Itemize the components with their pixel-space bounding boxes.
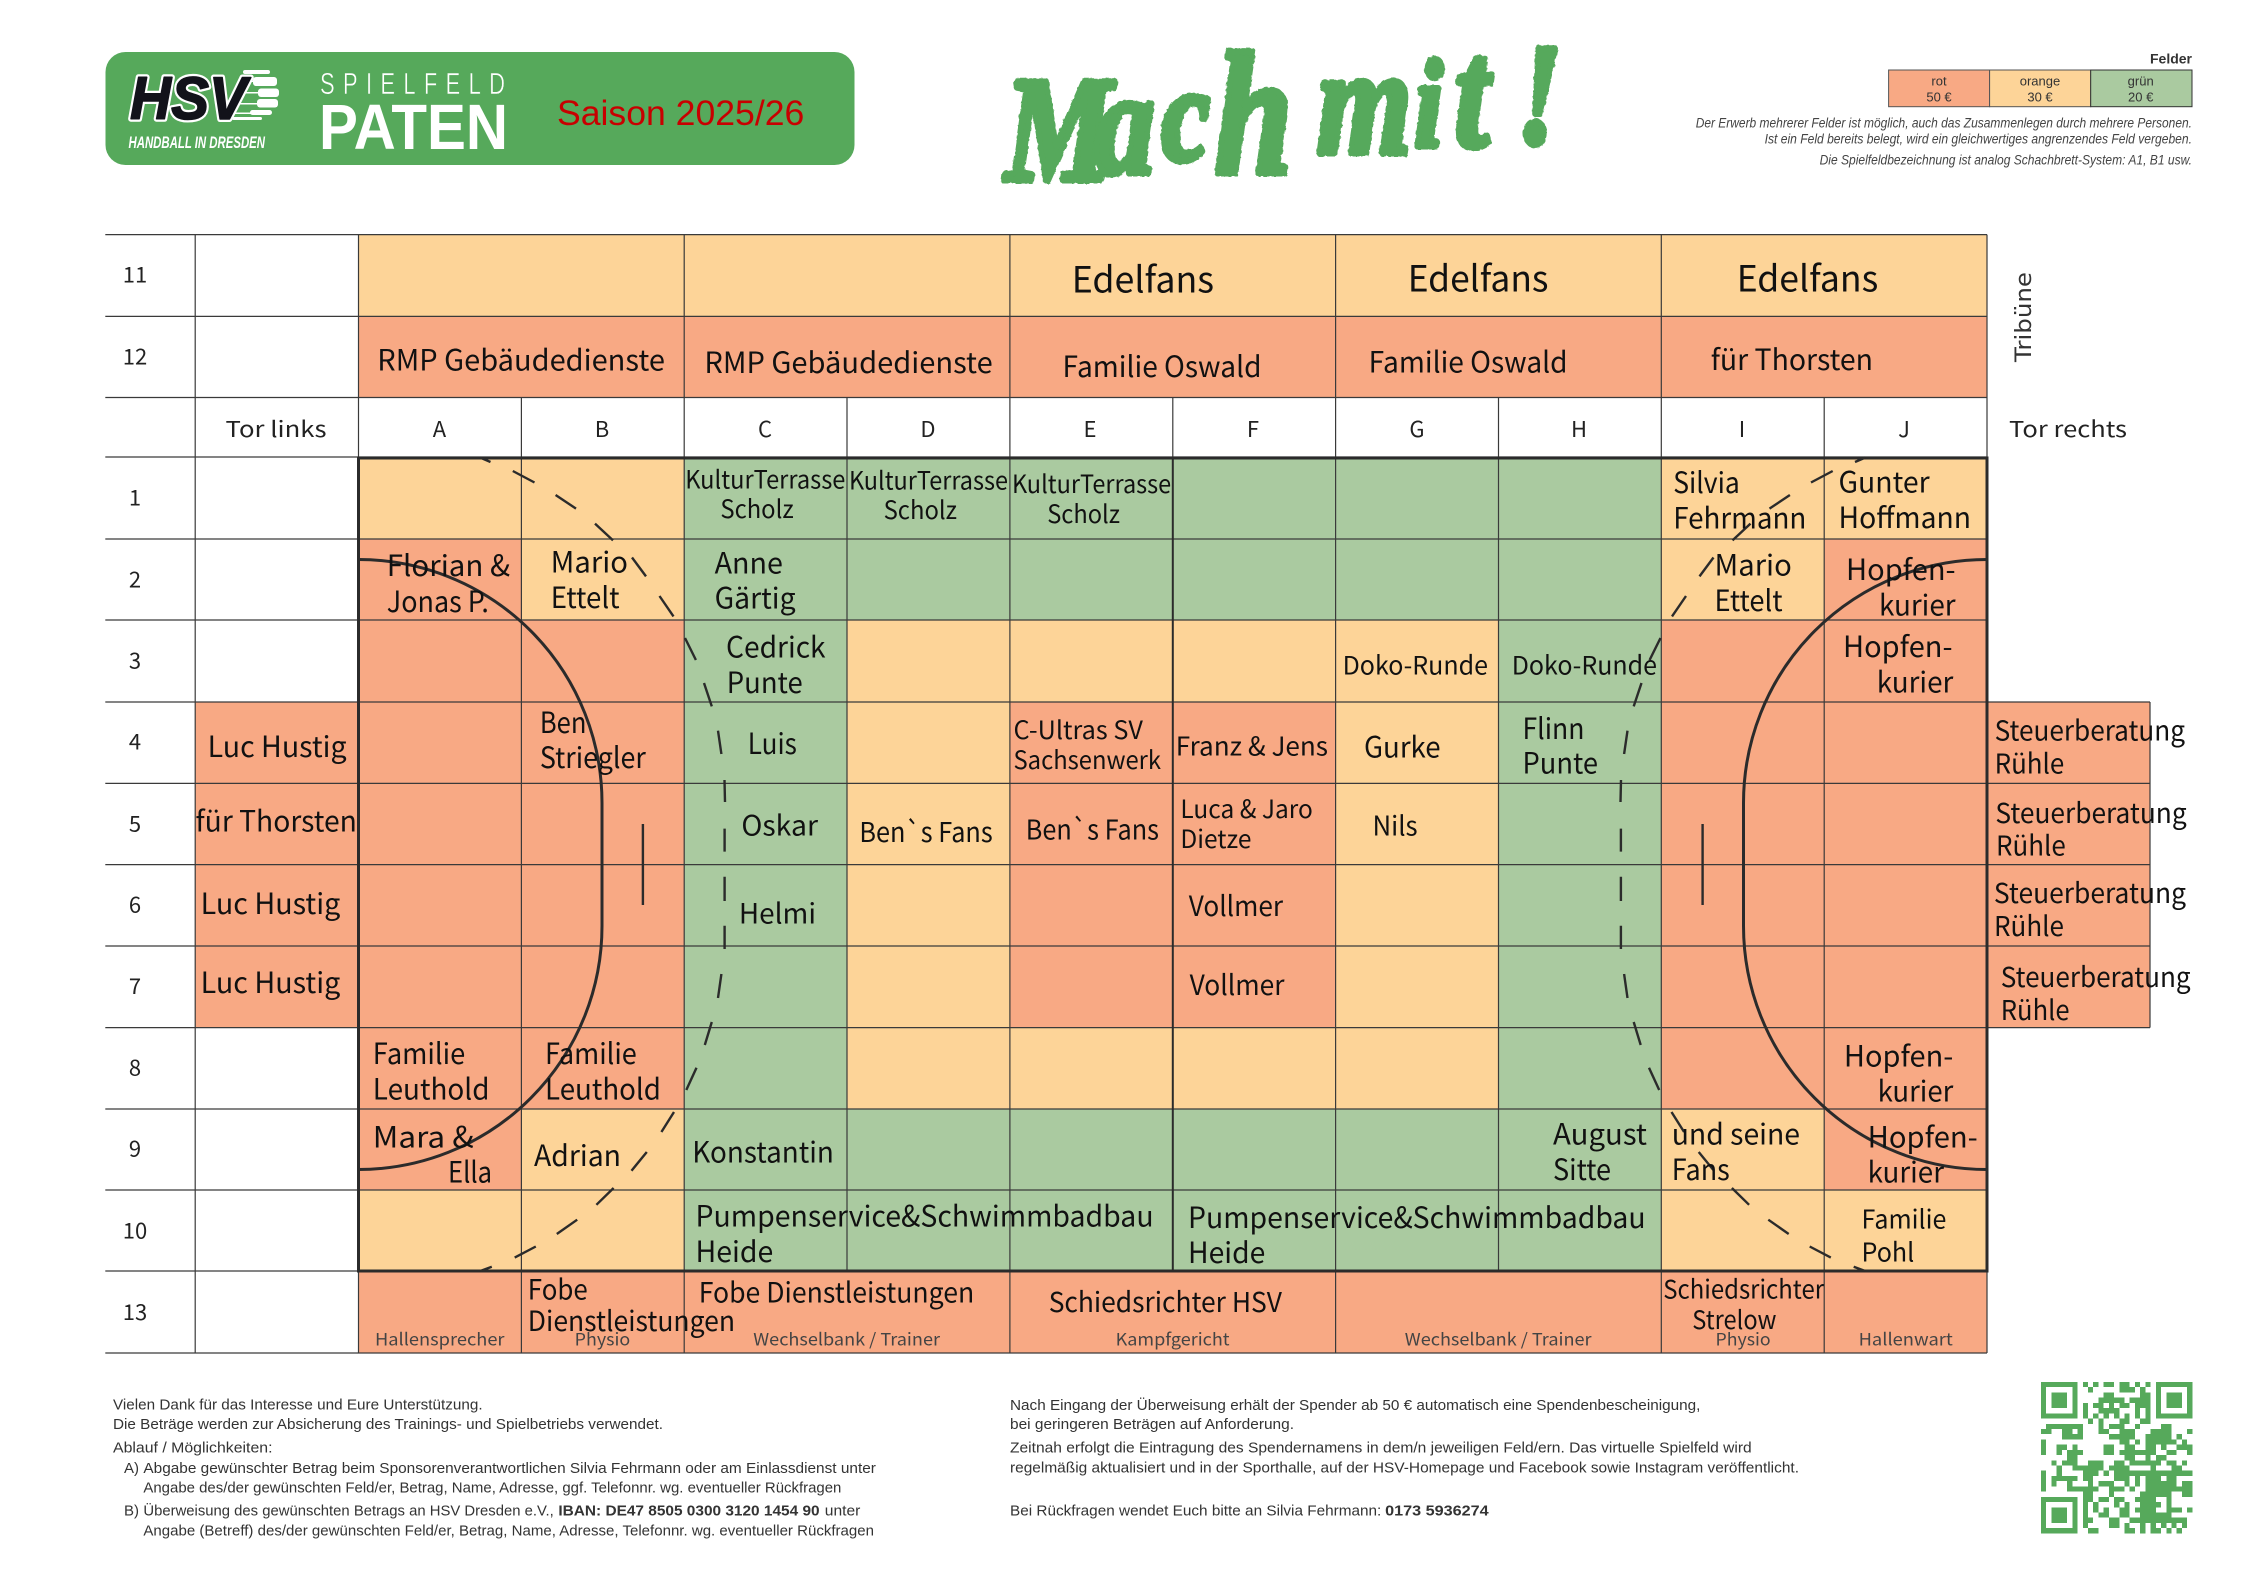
sponsors: row 2: Mario bbox=[1714, 543, 1792, 585]
footer text: right column: regelmäßig aktualisiert und in der Sporthalle, auf der HSV-Homepage und Facebook sowie Instagram veröffentlicht. bbox=[1010, 1460, 1799, 1477]
sponsors: row 3: kurier bbox=[1877, 660, 1954, 702]
footer text: left column: Abgabe gewünschter Betrag beim Sponsorenverantwortlichen Silvia Fehrmann oder am Einlassdienst unter bbox=[143, 1460, 876, 1477]
footer text: left column: IBAN: DE47 8505 0300 3120 1454 90 bbox=[558, 1503, 820, 1520]
sponsors: row 7: Luc Hustig bbox=[201, 960, 340, 1002]
sponsors: row 5: für Thorsten bbox=[196, 799, 357, 841]
title: Mach mit!: t bbox=[1455, 9, 1493, 180]
sponsors: row 2: Jonas P. bbox=[387, 579, 489, 621]
sponsors: row 10: Heide bbox=[696, 1229, 773, 1271]
court markings: left bbox=[358, 458, 725, 1271]
sponsors: row 8: kurier bbox=[1878, 1068, 1954, 1110]
sponsors: row 13: Fobe Dienstleistungen bbox=[699, 1271, 974, 1311]
row numbers: 9 bbox=[129, 1132, 141, 1164]
column headers: Tor rechts bbox=[2009, 412, 2127, 444]
sponsors: row 9: und seine bbox=[1672, 1111, 1800, 1153]
banner: HSV Spielfeld Paten bbox=[106, 52, 854, 165]
sponsors: row 1: Scholz bbox=[720, 490, 794, 526]
sponsors: row 4: Punte bbox=[1522, 741, 1598, 783]
sponsors: row 2: Florian & bbox=[387, 543, 510, 585]
column headers: A bbox=[433, 412, 447, 444]
sponsors: row 9: Sitte bbox=[1553, 1147, 1611, 1189]
sponsors: row 1: Fehrmann bbox=[1673, 496, 1806, 538]
column headers: E bbox=[1084, 412, 1096, 444]
logo: HSV handball: HSV bbox=[130, 65, 252, 132]
row numbers: 8 bbox=[129, 1050, 141, 1082]
sponsors: rows 11 and 12: RMP Gebäudedienste bbox=[377, 338, 665, 380]
sponsors: row 6: Steuerberatung bbox=[1994, 871, 2186, 911]
sponsors: row 10: Pumpenservice&Schwimmbadbau bbox=[1188, 1195, 1646, 1237]
label: Tribüne: Tribüne bbox=[2012, 272, 2037, 363]
logo: HSV handball: HANDBALL IN DRESDEN bbox=[128, 134, 266, 152]
sponsors: row 4: Ben bbox=[540, 700, 586, 742]
legend notes: Die Spielfeldbezeichnung ist analog Schachbrett-System: A1, B1 usw. bbox=[1820, 152, 2192, 167]
legend notes: Ist ein Feld bereits belegt, wird ein gleichwertiges angrenzendes Feld vergeben. bbox=[1765, 131, 2192, 146]
row numbers: 11 bbox=[123, 258, 147, 290]
footer text: left column: unter bbox=[825, 1503, 860, 1520]
sponsors: row 1: KulturTerrasse bbox=[849, 461, 1008, 497]
footer text: left column: Angabe des/der gewünschten Feld/er, Betrag, Name, Adresse, ggf. Telefonnr. wg. eventueller Rückfragen bbox=[143, 1479, 841, 1496]
wordmark: Spielfeld Paten: PATEN bbox=[319, 91, 508, 163]
sponsors: row 6: Rühle bbox=[1994, 904, 2064, 944]
column headers: Tor links bbox=[226, 412, 326, 444]
row 13 position labels: Wechselbank / Trainer bbox=[1405, 1326, 1592, 1351]
sponsors: row 4: Striegler bbox=[540, 735, 646, 777]
sponsors: row 9: Fans bbox=[1672, 1147, 1730, 1189]
grid: coloured field cells bbox=[105, 235, 2150, 1353]
sponsors: row 3: Cedrick bbox=[726, 624, 826, 666]
logo: HSV handball: HSV bbox=[130, 65, 252, 132]
row 13 position labels: Physio bbox=[575, 1326, 630, 1351]
column headers: F bbox=[1247, 412, 1259, 444]
footer text: left column: B) bbox=[124, 1503, 139, 1520]
sponsors: row 9: Hopfen- bbox=[1868, 1114, 1978, 1156]
sponsors: row 6: Vollmer bbox=[1189, 885, 1283, 925]
sponsors: row 5: Oskar bbox=[741, 804, 818, 844]
sponsors: row 1: Silvia bbox=[1673, 460, 1740, 502]
sponsors: row 7: Rühle bbox=[2001, 988, 2070, 1028]
sponsors: row 10: Familie bbox=[1862, 1200, 1946, 1236]
column headers: B bbox=[595, 412, 609, 444]
sponsors: row 1: Gunter bbox=[1838, 460, 1930, 502]
row 13 position labels: Wechselbank / Trainer bbox=[753, 1326, 940, 1351]
sponsors: row 1: KulturTerrasse bbox=[685, 461, 845, 497]
sponsors: row 9: August bbox=[1553, 1111, 1647, 1153]
sponsors: rows 11 and 12: RMP Gebäudedienste bbox=[704, 340, 993, 382]
title: Mach mit!: M bbox=[1003, 47, 1115, 213]
sponsors: row 1: KulturTerrasse bbox=[1012, 465, 1171, 501]
footer text: right column: Bei Rückfragen wendet Euch bitte an Silvia Fehrmann: bbox=[1010, 1502, 1381, 1519]
legend: Felder prices: orange bbox=[2020, 74, 2060, 89]
sponsors: row 2: Mario bbox=[551, 540, 628, 582]
row numbers: 2 bbox=[129, 562, 141, 594]
sponsors: rows 11 and 12 bbox=[377, 250, 1878, 386]
row 13 position labels bbox=[375, 1326, 1953, 1351]
sponsors: row 5: Steuerberatung bbox=[1995, 791, 2187, 831]
column headers bbox=[226, 412, 2127, 444]
sponsors: row 1 bbox=[685, 460, 1971, 538]
sponsors: row 1: Scholz bbox=[884, 491, 957, 527]
column headers: C bbox=[758, 412, 772, 444]
footer text: right column: Zeitnah erfolgt die Eintragung des Spendernamens in dem/n jeweiligen Feld/ern. Das virtuelle Spielfeld wird bbox=[1010, 1440, 1752, 1457]
title: Mach mit!: m bbox=[1317, 17, 1412, 186]
title: Mach mit!: c bbox=[1162, 41, 1210, 190]
title: Mach mit!: i bbox=[1415, 36, 1442, 174]
legend: Felder prices: 30 € bbox=[2027, 90, 2053, 105]
footer text: left column bbox=[113, 1396, 876, 1540]
sponsors: row 3: Punte bbox=[727, 660, 803, 702]
sponsors: row 10: Pohl bbox=[1862, 1232, 1914, 1269]
sponsors: row 8: Familie bbox=[545, 1031, 637, 1073]
sponsors: row 13 bbox=[528, 1268, 1824, 1340]
sponsors: rows 11 and 12: Edelfans bbox=[1737, 250, 1878, 302]
sponsors: row 7: Vollmer bbox=[1190, 964, 1285, 1004]
legend: Felder prices: Felder bbox=[2150, 50, 2193, 66]
sponsors: row 1: Scholz bbox=[1047, 495, 1120, 531]
sponsors: row 9: Konstantin bbox=[692, 1130, 834, 1172]
sponsors: row 2 bbox=[387, 540, 1956, 625]
sponsors: row 13: Schiedsrichter HSV bbox=[1049, 1280, 1282, 1320]
sponsors: row 5 bbox=[196, 790, 2187, 863]
legend: Felder prices bbox=[1889, 50, 2193, 107]
sponsors: row 6 bbox=[201, 871, 2186, 944]
sponsors: row 8: Hopfen- bbox=[1844, 1033, 1953, 1075]
sponsors: row 13: Fobe bbox=[528, 1268, 588, 1308]
sponsors: rows 11 and 12: Familie Oswald bbox=[1062, 344, 1262, 386]
title: Mach mit! bbox=[1003, 9, 1562, 213]
wordmark: Spielfeld Paten: SPIELFELD bbox=[320, 66, 505, 101]
sponsors: row 3 bbox=[726, 624, 1954, 702]
sponsors: row 8: Leuthold bbox=[545, 1066, 661, 1108]
sponsors: row 2: Hopfen- bbox=[1846, 547, 1956, 589]
row numbers: 3 bbox=[129, 644, 141, 676]
sponsors: row 4: Steuerberatung bbox=[1995, 709, 2185, 749]
column headers: J bbox=[1898, 412, 1910, 444]
title: Mach mit!: a bbox=[1095, 42, 1155, 205]
row numbers: 7 bbox=[129, 969, 141, 1001]
legend: Felder prices: 50 € bbox=[1926, 90, 1952, 105]
sponsors: row 10: Pumpenservice&Schwimmbadbau bbox=[696, 1194, 1154, 1236]
column headers: G bbox=[1409, 412, 1425, 444]
sponsors: rows 11 and 12: für Thorsten bbox=[1711, 337, 1873, 379]
sponsors: row 8 bbox=[373, 1031, 1954, 1110]
footer text: right column bbox=[1010, 1396, 1799, 1519]
legend: Felder prices: grün bbox=[2128, 74, 2154, 89]
row 13 position labels: Kampfgericht bbox=[1116, 1326, 1230, 1351]
sponsors: row 5: Luca & Jaro bbox=[1180, 790, 1313, 826]
row numbers: 6 bbox=[129, 888, 141, 920]
sponsors: row 9: Ella bbox=[448, 1150, 492, 1192]
sponsors: row 3: Doko-Runde bbox=[1512, 646, 1657, 683]
sponsors: row 10 bbox=[696, 1194, 1946, 1272]
row numbers: 4 bbox=[129, 724, 141, 756]
legend: Felder prices: rot bbox=[1931, 74, 1947, 89]
sponsors: row 2: kurier bbox=[1879, 583, 1956, 625]
footer text: left column: A) bbox=[124, 1460, 139, 1477]
season label: Saison 2025/26 bbox=[557, 93, 804, 133]
logo: HSV handball bbox=[128, 65, 279, 152]
sponsors: row 3: Hopfen- bbox=[1843, 624, 1952, 666]
legend: Felder prices: 20 € bbox=[2128, 90, 2154, 105]
sponsors: rows 11 and 12: Edelfans bbox=[1072, 252, 1214, 304]
sponsors: row 5: Ben`s Fans bbox=[859, 810, 993, 850]
wordmark: Spielfeld Paten bbox=[319, 66, 508, 163]
sponsors: row 5: Dietze bbox=[1180, 820, 1252, 856]
title: Mach mit!: ! bbox=[1517, 16, 1562, 175]
footer text: left column: Angabe (Betreff) des/der gewünschten Feld/er, Betrag, Name, Adresse, Telefonnr. wg. eventueller Rückfragen bbox=[143, 1523, 874, 1540]
footer text: right column: bei geringeren Beträgen auf Anforderung. bbox=[1010, 1416, 1294, 1433]
sponsors: row 6: Helmi bbox=[739, 892, 816, 932]
sponsors: row 5: Nils bbox=[1372, 804, 1418, 844]
sponsors: row 13: Dienstleistungen bbox=[528, 1300, 735, 1340]
sponsors: row 10: Heide bbox=[1188, 1230, 1265, 1272]
sponsors: row 8: Familie bbox=[373, 1031, 465, 1073]
row 13 position labels: Physio bbox=[1716, 1326, 1771, 1351]
footer text: left column: Die Beträge werden zur Absicherung des Trainings- und Spielbetriebs verwendet. bbox=[113, 1416, 663, 1433]
sponsors: row 9: kurier bbox=[1868, 1150, 1945, 1192]
sponsors: row 7: Steuerberatung bbox=[2001, 955, 2191, 995]
court markings: right bbox=[1620, 458, 1987, 1271]
sponsors: row 2: Anne bbox=[715, 541, 783, 583]
sponsors: row 2: Ettelt bbox=[551, 575, 620, 617]
row numbers: 10 bbox=[123, 1214, 147, 1246]
sponsors: row 7 bbox=[201, 955, 2191, 1028]
sponsors: row 13: Schiedsrichter bbox=[1663, 1270, 1824, 1307]
footer text: left column: Vielen Dank für das Interesse und Eure Unterstützung. bbox=[113, 1396, 483, 1413]
row numbers: 13 bbox=[123, 1295, 147, 1327]
sponsors: row 2: Gärtig bbox=[715, 576, 796, 618]
sponsors: row 4: Luc Hustig bbox=[208, 724, 347, 766]
sponsors: row 9: Mara & bbox=[373, 1114, 474, 1156]
QR code bbox=[2041, 1382, 2192, 1533]
sponsors: row 4: C-Ultras SV bbox=[1014, 711, 1144, 747]
footer text: right column: 0173 5936274 bbox=[1385, 1502, 1489, 1519]
sponsors: row 5: Rühle bbox=[1996, 823, 2066, 863]
row numbers: 5 bbox=[129, 806, 141, 838]
sponsors: row 4: Luis bbox=[748, 721, 797, 763]
column headers: I bbox=[1739, 412, 1745, 444]
column headers: H bbox=[1571, 412, 1587, 444]
sponsors: rows 11 and 12: Familie Oswald bbox=[1369, 340, 1568, 382]
sponsors: row 1: Hoffmann bbox=[1838, 495, 1971, 537]
sponsors: row 5: Ben`s Fans bbox=[1026, 807, 1159, 847]
legend notes: Der Erwerb mehrerer Felder ist möglich, auch das Zusammenlegen durch mehrere Personen. bbox=[1696, 115, 2192, 130]
row 13 position labels: Hallensprecher bbox=[375, 1326, 505, 1351]
sponsors: rows 11 and 12: Edelfans bbox=[1408, 250, 1548, 302]
row numbers: 12 bbox=[123, 340, 147, 372]
sponsors: row 9 bbox=[373, 1111, 1978, 1192]
sponsors: row 4: Sachsenwerk bbox=[1014, 741, 1161, 777]
sponsors: row 9: Adrian bbox=[534, 1133, 621, 1175]
sponsors: row 4: Franz & Jens bbox=[1176, 727, 1328, 764]
sponsors: row 4: Gurke bbox=[1364, 724, 1441, 766]
sponsors: row 13: Strelow bbox=[1692, 1300, 1776, 1337]
sponsors: row 3: Doko-Runde bbox=[1343, 646, 1488, 683]
legend notes bbox=[1696, 115, 2192, 167]
footer text: left column: Ablauf / Möglichkeiten: bbox=[113, 1440, 272, 1457]
row numbers: 1 bbox=[129, 480, 141, 512]
sponsors: row 4: Flinn bbox=[1522, 706, 1584, 748]
footer text: left column: Überweisung des gewünschten Betrags an HSV Dresden e.V., bbox=[143, 1502, 554, 1520]
sponsors: row 8: Leuthold bbox=[373, 1066, 490, 1108]
row numbers bbox=[123, 258, 147, 1327]
row 13 position labels: Hallenwart bbox=[1859, 1326, 1953, 1351]
sponsors: row 4: Rühle bbox=[1995, 742, 2064, 782]
sponsors: row 2: Ettelt bbox=[1714, 578, 1783, 620]
title: Mach mit!: h bbox=[1215, 18, 1292, 212]
column headers: D bbox=[920, 412, 936, 444]
footer text: right column: Nach Eingang der Überweisung erhält der Spender ab 50 € automatisch eine Spendenbescheinigung, bbox=[1010, 1396, 1700, 1414]
sponsors: row 4 bbox=[208, 700, 2185, 783]
sponsors: row 6: Luc Hustig bbox=[201, 881, 340, 923]
